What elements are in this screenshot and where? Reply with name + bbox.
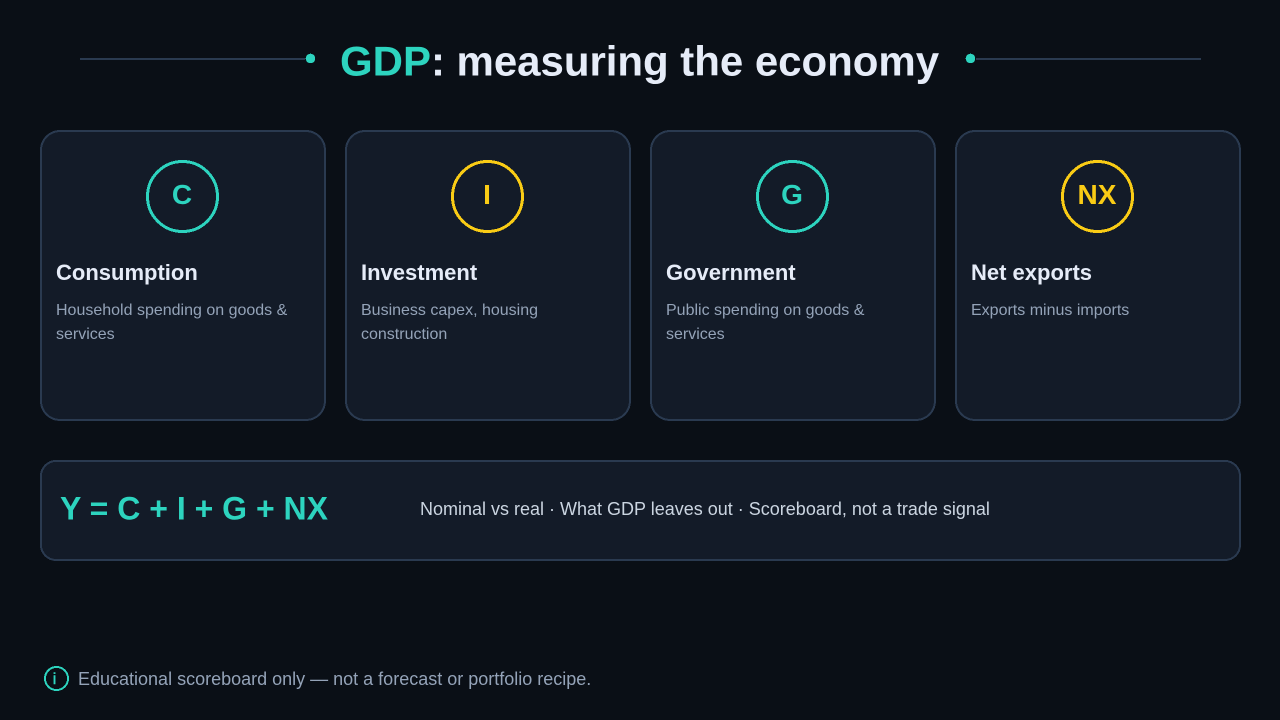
disclaimer: Educational scoreboard only — not a forecast or portfolio recipe. xyxy=(78,669,591,689)
icon: C xyxy=(148,162,218,232)
formula notes: Nominal vs real · What GDP leaves out · Scoreboard, not a trade signal xyxy=(420,499,990,519)
panel: consumption xyxy=(41,131,325,420)
description: consumption: Household spending on goods & xyxy=(56,302,288,319)
panel: net exports xyxy=(956,131,1240,420)
icon: G: G xyxy=(781,179,803,210)
heading: investment: Investment xyxy=(361,260,478,285)
heading: consumption: Consumption xyxy=(56,260,198,285)
panel: formula xyxy=(41,461,1240,560)
icon: info: i xyxy=(53,671,56,688)
footer note xyxy=(45,667,591,690)
heading: net exports: Net exports xyxy=(971,260,1092,285)
icon: I: I xyxy=(483,179,491,210)
icon: NX: NX xyxy=(1078,179,1117,210)
description: investment: Business capex, housing xyxy=(361,302,538,319)
description: net exports: Exports minus imports xyxy=(971,302,1129,319)
icon: G xyxy=(758,162,828,232)
description: government: Public spending on goods & xyxy=(666,302,865,319)
icon: NX xyxy=(1062,162,1132,232)
title header xyxy=(80,38,1201,84)
panel: investment xyxy=(346,131,630,420)
description: consumption: services xyxy=(56,326,115,343)
icon: info xyxy=(45,667,68,690)
panel: government xyxy=(651,131,935,420)
title: GDP: measuring the economy xyxy=(340,38,940,84)
icon: C: C xyxy=(172,179,192,210)
description: investment: construction xyxy=(361,326,447,343)
icon: I xyxy=(452,162,522,232)
heading: government: Government xyxy=(666,260,796,285)
formula: Y = C + I + G + NX xyxy=(60,490,329,526)
description: government: services xyxy=(666,326,725,343)
